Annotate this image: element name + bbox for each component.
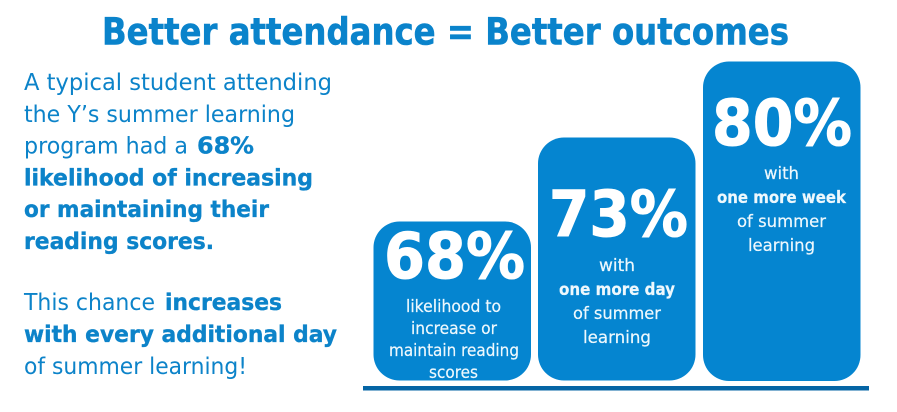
bar: 73%: 73% (549, 178, 688, 251)
bar: 80%: of summer (737, 212, 826, 231)
text block: reading likelihood: 68% (197, 134, 254, 160)
title: Better attendance = Better outcomes (102, 10, 789, 54)
bar: 80%: with (764, 164, 799, 183)
text block: reading likelihood (24, 70, 332, 255)
text block: reading likelihood: program had a (24, 134, 188, 160)
text block: reading likelihood: reading scores. (24, 229, 214, 255)
bar: 73%: one more day (559, 280, 675, 299)
text block: additional day: This chance (23, 290, 155, 316)
bar: 73%: with (599, 256, 635, 275)
bar: 68%: 68% (384, 220, 525, 293)
bar: 80%: learning (748, 236, 815, 255)
bar: 68%: likelihood to (406, 297, 501, 316)
text block: additional day (23, 290, 337, 380)
bar: 68%: increase or (411, 319, 497, 338)
bar: 80%: 80% (712, 87, 852, 160)
text block: additional day: with every additional day (24, 322, 337, 348)
bar: 80%: one more week (717, 188, 847, 207)
text block: additional day: of summer learning! (24, 354, 247, 380)
bar: 68% (374, 220, 531, 382)
baseline bar (363, 386, 869, 390)
bar: 68%: maintain reading (389, 341, 519, 360)
bar: 73%: of summer (573, 304, 661, 323)
bar chart: attendance steps (363, 62, 869, 390)
bar: 68%: scores (429, 363, 478, 382)
bar: 80% (703, 62, 860, 381)
text block: additional day: increases (165, 290, 282, 316)
text block: reading likelihood: or maintaining their (24, 197, 270, 223)
text block: reading likelihood: likelihood of increasing (24, 166, 313, 192)
text block: reading likelihood: the Y’s summer learning (24, 102, 295, 128)
text block: reading likelihood: A typical student attending (24, 70, 332, 96)
bar: 73%: learning (583, 328, 651, 347)
bar: 73% (538, 138, 696, 380)
